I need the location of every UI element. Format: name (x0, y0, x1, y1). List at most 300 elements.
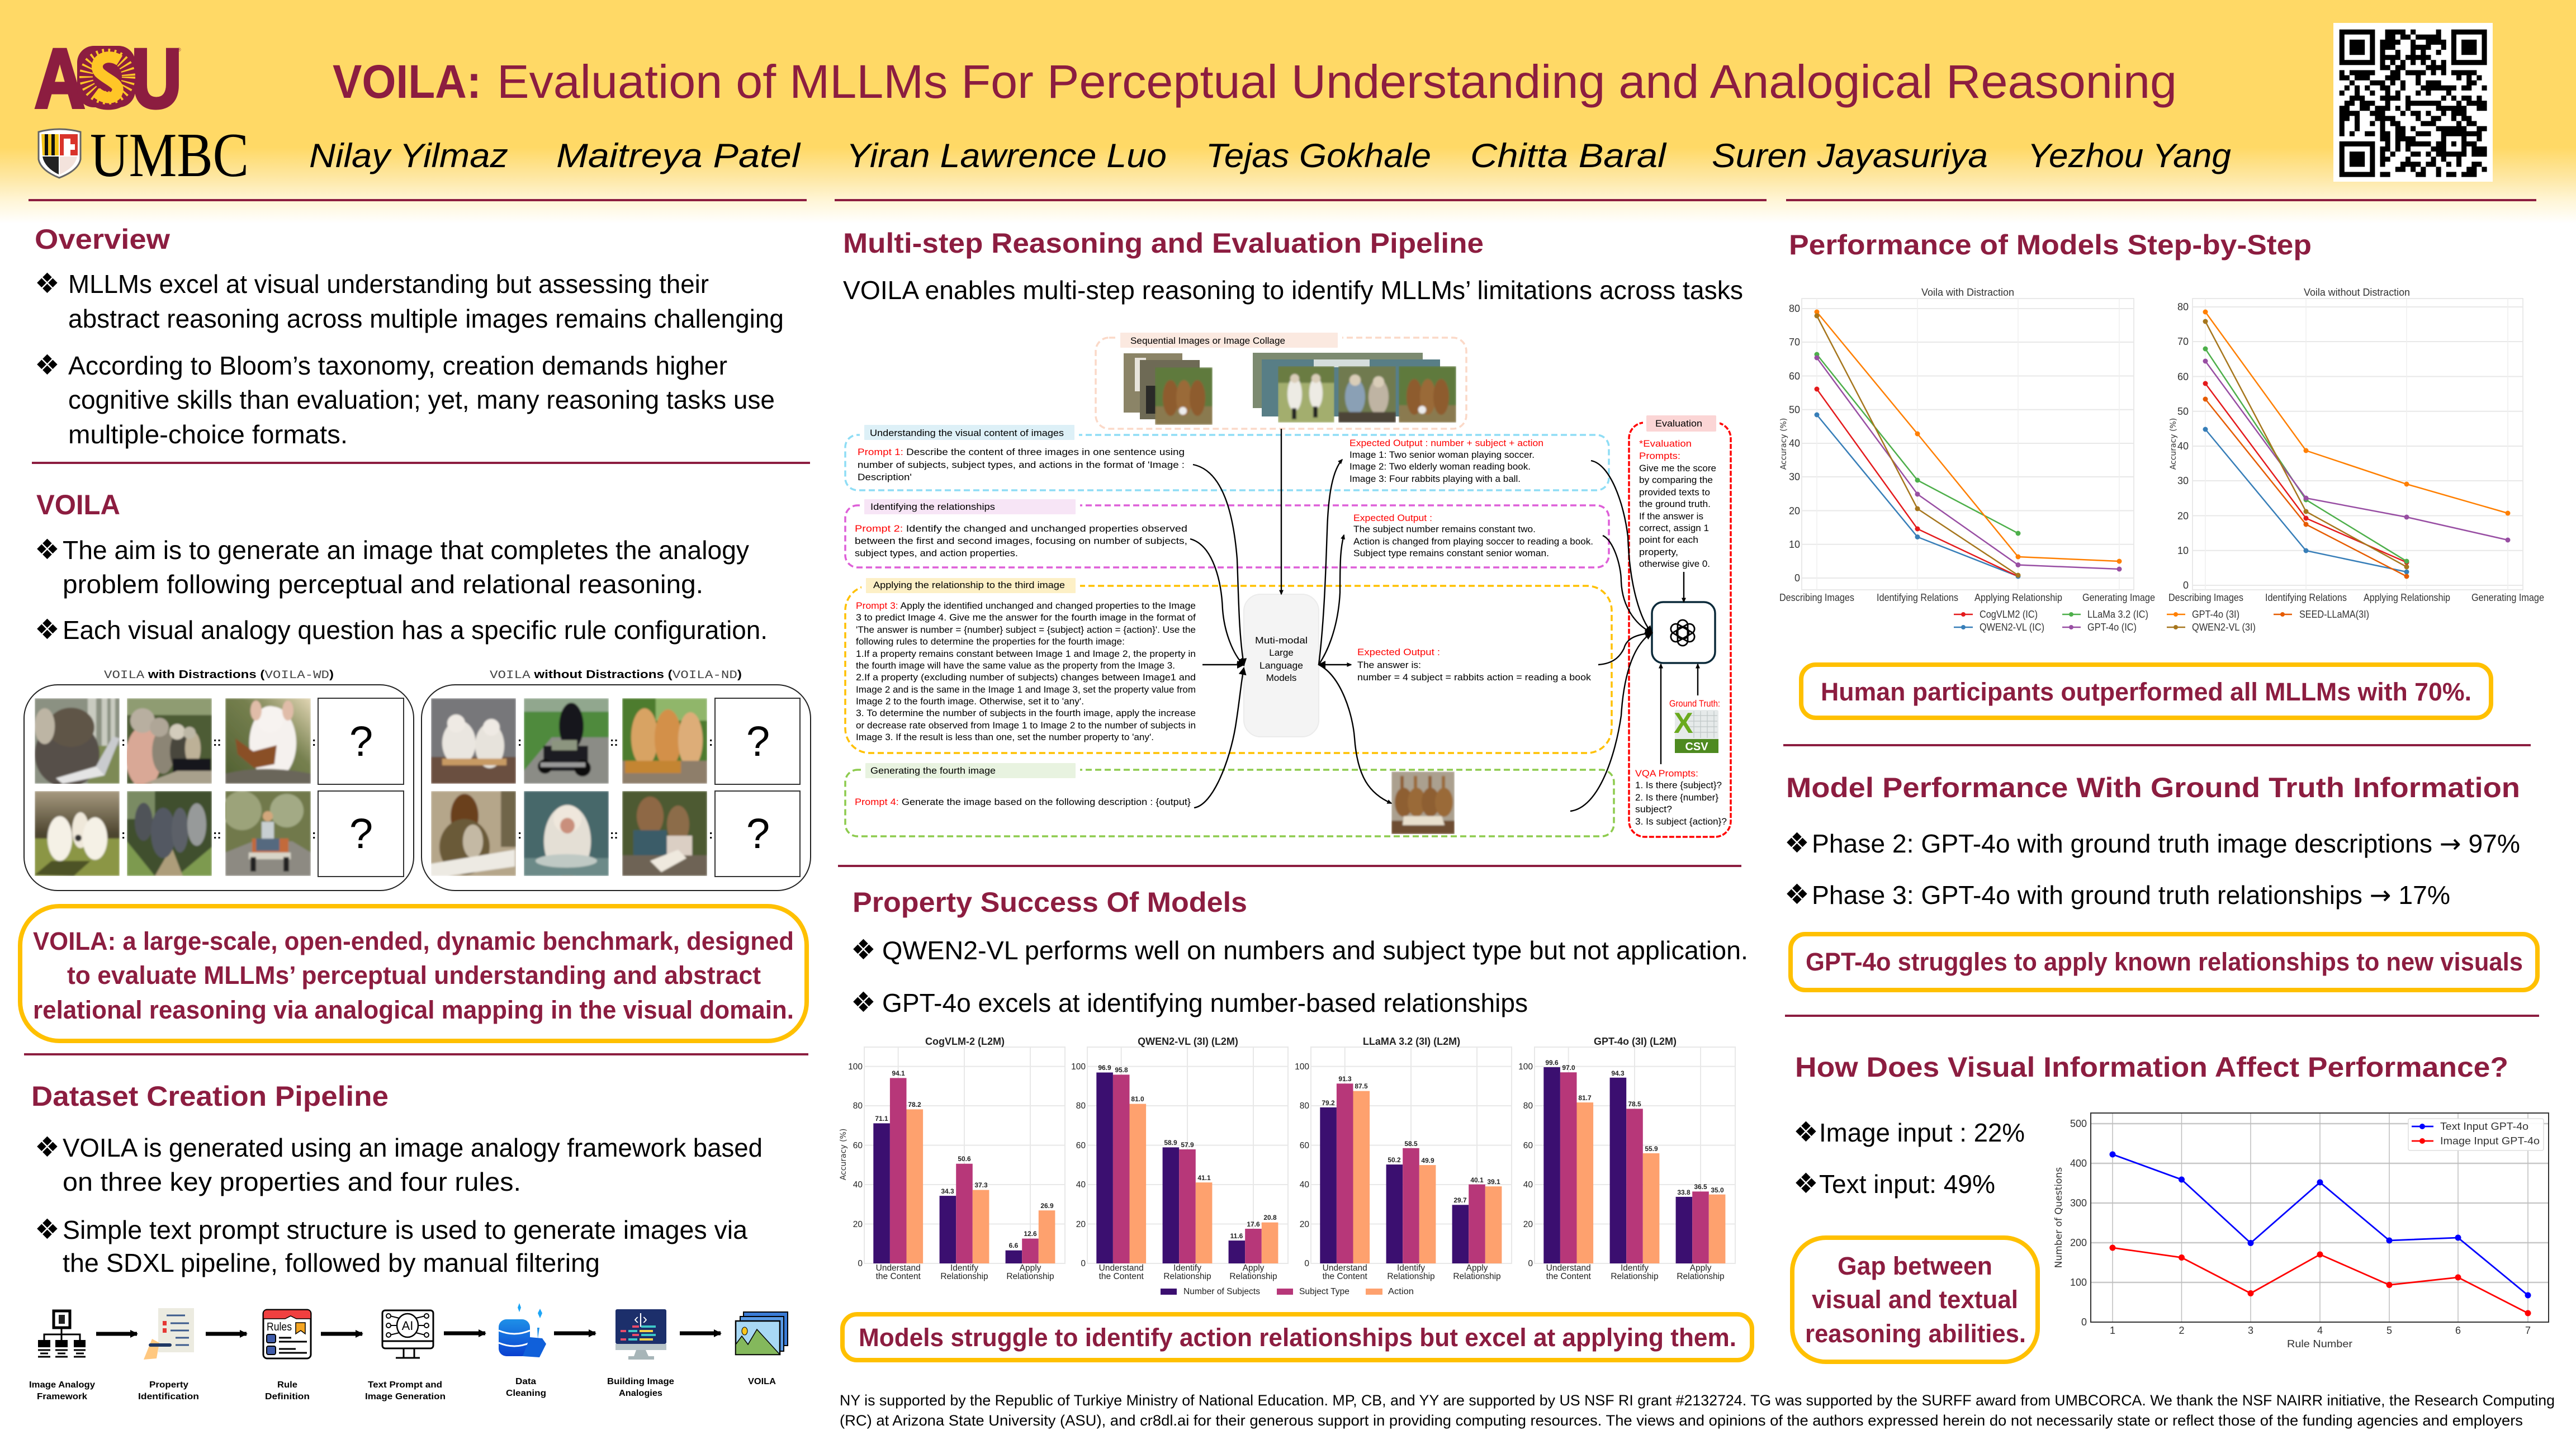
bar chart: GPT-4o (1518, 1036, 1735, 1281)
bar chart: CogVLM-2: Identify (950, 1263, 978, 1273)
dataset bullets: ❖ (35, 1131, 60, 1163)
evaluation prompts: Prompts: (1639, 451, 1680, 461)
input bullets: ❖ (1793, 1167, 1819, 1200)
image: women typing (127, 698, 212, 784)
prompt 1 (858, 447, 1185, 482)
bar chart: QWEN2-VL: the Content (1099, 1272, 1144, 1281)
line chart: without distraction: Accuracy (%) (2169, 418, 2178, 470)
line chart: with distraction: Identifying Relations (1877, 592, 1958, 603)
bar chart: GPT-4o: 97.0 (1562, 1064, 1575, 1072)
callout: VOILA definition (20, 906, 807, 1041)
line chart: with distraction: 10 (1789, 539, 1800, 550)
line chart legend: GPT-4o (3I) (2192, 609, 2239, 620)
arrow (206, 1332, 247, 1336)
pipeline labels: Image Analogy (29, 1380, 95, 1390)
bar chart: GPT-4o: 100 (1518, 1062, 1533, 1072)
panel: multi-modal LLM: Models (1266, 673, 1296, 683)
panel: generating the fourth image: Generating the fourth image (870, 765, 996, 776)
bar chart: GPT-4o: 33.8 (1677, 1188, 1690, 1196)
image: boy in toy car (225, 791, 311, 876)
icon: building image analogies: ‹|› (634, 1310, 647, 1327)
evaluation prompts: Give me the score (1639, 463, 1716, 473)
bar chart: GPT-4o: 0 (1528, 1259, 1533, 1268)
panel: multi-modal LLM: Large (1269, 647, 1294, 658)
pipeline labels: Analogies (619, 1389, 662, 1398)
bar chart: QWEN2-VL: Apply (1243, 1263, 1265, 1273)
icon: rule definition: Rules (267, 1321, 292, 1333)
bar chart: CogVLM-2: 26.9 (1040, 1202, 1054, 1210)
image: white monkey in water (524, 791, 609, 878)
panel: multi-modal LLM: Muti-modal (1255, 635, 1308, 646)
line chart: with distraction: 30 (1789, 471, 1800, 482)
header background (0, 0, 2576, 224)
bar chart: QWEN2-VL: 41.1 (1197, 1174, 1211, 1182)
line chart: rule number: 6 (2455, 1325, 2461, 1336)
bar chart: GPT-4o: Apply (1690, 1263, 1712, 1273)
expected output 2: Expected Output : (1353, 513, 1432, 523)
line chart: with distraction: 50 (1789, 404, 1800, 415)
line chart legend (1954, 609, 2369, 633)
bar chart: CogVLM-2: 20 (853, 1220, 863, 1229)
bar chart: QWEN2-VL: 100 (1071, 1062, 1086, 1072)
prompt 3: 3. To determine the number of subjects in the fourth image, apply the increase (856, 708, 1196, 718)
line chart legend: LLaMa 3.2 (IC) (2087, 609, 2148, 620)
bar chart: QWEN2-VL: 81.0 (1131, 1095, 1144, 1103)
icon: property identification (144, 1308, 194, 1360)
bar chart: GPT-4o: 94.3 (1611, 1069, 1625, 1077)
bar chart: QWEN2-VL: Identify (1173, 1263, 1201, 1273)
VQA prompts (1635, 768, 1727, 827)
analogy colons: : (312, 827, 316, 841)
heading: multi-step pipeline: Multi-step Reasoning and Evaluation Pipeline (843, 228, 1484, 259)
line chart: with distraction: 80 (1789, 303, 1800, 314)
figure title: with distractions: VOILA with Distractions ( VOILA-WD ) (104, 669, 334, 682)
callout: models struggle: Models struggle to identify action relationships but excel at applying them. (859, 1323, 1736, 1352)
bar chart: LLaMA 3.2: Identify (1397, 1263, 1425, 1273)
bar chart: QWEN2-VL: 0 (1081, 1259, 1086, 1268)
panel: generating the fourth image (845, 761, 1614, 836)
line chart: rule number: 0 (2081, 1317, 2087, 1328)
ground truth bullets (1784, 827, 2520, 911)
prompt 2: subject types, and action properties. (855, 548, 1018, 558)
evaluation prompts: *Evaluation (1639, 438, 1692, 449)
bar chart: QWEN2-VL: 95.8 (1115, 1066, 1128, 1074)
input bullets: Image input : 22% (1819, 1118, 2025, 1147)
expected output 1: Image 3: Four rabbits playing with a ball. (1349, 473, 1521, 484)
callout: VOILA definition: to evaluate MLLMs’ perceptual understanding and abstract (67, 961, 761, 989)
bar chart: LLaMA 3.2: 40 (1300, 1180, 1309, 1190)
callout: human participants: Human participants outperformed all MLLMs with 70%. (1821, 678, 2471, 706)
overview bullets: ❖ (35, 349, 60, 381)
bar chart: LLaMA 3.2: 100 (1295, 1062, 1309, 1072)
bar chart legend: Number of Subjects (1183, 1287, 1260, 1296)
overview bullets: multiple-choice formats. (68, 420, 348, 449)
icon: building image analogies (615, 1309, 666, 1360)
ground truth label: Ground Truth: (1669, 698, 1720, 709)
panel: step-by-step performance (1779, 229, 2544, 718)
dataset bullets: Simple text prompt structure is used to generate images via (63, 1215, 747, 1244)
line chart: without distraction: 70 (2177, 336, 2189, 347)
line chart: rule number: 300 (2070, 1197, 2087, 1209)
VQA prompts: VQA Prompts: (1635, 768, 1698, 779)
bar chart: QWEN2-VL: 20.8 (1263, 1214, 1277, 1221)
panel: visual information (1792, 1052, 2549, 1362)
title: VOILA: (333, 55, 481, 108)
panel: VOILA (35, 489, 768, 646)
box: unknown answer top (318, 698, 404, 784)
prompt 3: 2.If a property (excluding number of subjects) changes between Image1 and (856, 672, 1196, 683)
callout: models struggle (842, 1314, 1752, 1360)
evaluation prompts: correct, assign 1 (1639, 523, 1709, 533)
panel: understanding visual content (845, 423, 1609, 490)
image: rabbits reading (1391, 771, 1455, 834)
line chart: without distraction: Identifying Relations (2265, 592, 2347, 603)
evaluation prompts: the ground truth. (1639, 499, 1711, 509)
line chart: without distraction: 20 (2177, 510, 2189, 522)
dataset bullets: VOILA is generated using an image analogy framework based (63, 1133, 763, 1162)
callout: human participants (1801, 665, 2491, 718)
authors: Yiran Lawrence Luo (846, 137, 1167, 174)
line chart legend: CogVLM2 (IC) (1980, 609, 2038, 620)
VQA prompts: 3. Is subject {action}? (1635, 816, 1727, 827)
bar chart: GPT-4o: GPT-4o (3I) (L2M) (1594, 1036, 1677, 1047)
bar chart: QWEN2-VL: 11.6 (1230, 1232, 1243, 1240)
bar chart: GPT-4o: Identify (1621, 1263, 1649, 1273)
panel: evaluation (1629, 414, 1731, 837)
heading: dataset creation pipeline: Dataset Creation Pipeline (31, 1081, 389, 1112)
panel: multi-modal LLM (1244, 594, 1319, 737)
line chart: rule number: 3 (2248, 1325, 2253, 1336)
line chart: rule number: 400 (2070, 1158, 2087, 1169)
authors: Maitreya Patel (556, 137, 801, 174)
line chart: rule number: 500 (2070, 1118, 2087, 1129)
line chart: without distraction: 60 (2177, 371, 2189, 382)
arrow (680, 1332, 721, 1335)
callout: GPT-4o struggles (1791, 934, 2537, 990)
bar chart: LLaMA 3.2: 29.7 (1453, 1196, 1467, 1204)
bar chart: GPT-4o: 55.9 (1645, 1145, 1658, 1153)
arrows: diagram connectors (1190, 429, 1698, 811)
expected output 3 (1357, 647, 1592, 683)
pipeline labels: Rule (277, 1380, 297, 1390)
ground truth bullets: Phase 3: GPT-4o with ground truth relationships → 17% (1812, 880, 2450, 910)
property bullets: ❖ (851, 934, 876, 966)
line chart: rule number: 4 (2317, 1325, 2323, 1336)
VQA prompts: subject? (1635, 804, 1672, 815)
image: three hamsters (622, 698, 707, 784)
overview bullets: cognitive skills than evaluation; yet, many reasoning tasks use (68, 385, 775, 414)
bar chart: GPT-4o: 40 (1523, 1180, 1533, 1190)
line chart: without distraction: 50 (2177, 406, 2189, 417)
panel: sequential images (1096, 330, 1466, 429)
icon: VOILA image stack (736, 1312, 788, 1355)
bar chart: QWEN2-VL: QWEN2-VL (3I) (L2M) (1138, 1036, 1238, 1047)
prompt 3: Image 2 to the fourth image. Otherwise, set it to 'any'. (856, 696, 1084, 707)
analogy colons: : (121, 827, 125, 841)
bar chart: LLaMA 3.2: 39.1 (1487, 1178, 1500, 1186)
box: unknown answer bottom (318, 791, 404, 877)
bar chart: CogVLM-2: Apply (1020, 1263, 1041, 1273)
bar chart: LLaMA 3.2: 79.2 (1322, 1099, 1335, 1107)
callout: VOILA definition: relational reasoning via analogical mapping in the visual domain. (33, 996, 794, 1024)
analogy colons: : (709, 735, 713, 749)
bar chart: CogVLM-2: 60 (853, 1141, 863, 1150)
callout: gap (1792, 1238, 2038, 1362)
line chart: without distraction: Describing Images (2168, 592, 2243, 603)
VQA prompts: 2. Is there {number} (1635, 792, 1718, 803)
bar chart: CogVLM-2: 6.6 (1009, 1242, 1019, 1249)
bar chart: GPT-4o: 36.5 (1694, 1183, 1707, 1191)
panel: identifying relationships: Identifying the relationships (870, 501, 995, 512)
line chart: rule number: 200 (2070, 1237, 2087, 1248)
bar chart: CogVLM-2: 71.1 (875, 1115, 888, 1123)
callout: gap: reasoning abilities. (1805, 1319, 2026, 1348)
bar chart: LLaMA 3.2: 0 (1304, 1259, 1309, 1268)
image: hamsters and popcorn (431, 698, 516, 784)
line chart: without distraction: Voila without Distraction (2304, 287, 2410, 298)
bar chart: CogVLM-2: CogVLM-2 (L2M) (925, 1036, 1005, 1047)
bar chart: QWEN2-VL: Relationship (1229, 1272, 1277, 1281)
image: girls writing (622, 791, 707, 876)
line chart: rule number: 7 (2525, 1325, 2531, 1336)
icon: CSV file: CSV (1685, 741, 1708, 753)
pipeline labels: Property (149, 1380, 188, 1390)
logo: UMBC: UMBC (90, 121, 249, 190)
expected output 1 (1349, 438, 1543, 484)
bar chart: CogVLM-2 (848, 1036, 1065, 1281)
title: Evaluation of MLLMs For Perceptual Understanding and Analogical Reasoning (497, 55, 2177, 108)
bar chart: LLaMA 3.2: 20 (1300, 1220, 1309, 1229)
bar chart legend (1161, 1287, 1414, 1296)
dataset bullets: ❖ (35, 1213, 60, 1246)
analogy colons: :: (610, 827, 618, 841)
bar chart legend: Action (1388, 1287, 1414, 1296)
bar chart: LLaMA 3.2: Understand (1323, 1263, 1367, 1273)
icon: data cleaning (499, 1303, 546, 1357)
prompt 3: following rules to determine the properties for the fourth image: (856, 636, 1125, 647)
prompt 2: between the first and second images, focusing on number of subjects, (855, 536, 1187, 546)
pipeline labels: Data (515, 1377, 536, 1386)
authors: Suren Jayasuriya (1712, 137, 1988, 174)
authors (309, 137, 2231, 174)
bar chart: LLaMA 3.2: the Content (1323, 1272, 1367, 1281)
ground truth bullets: Phase 2: GPT-4o with ground truth image descriptions → 97% (1812, 828, 2520, 859)
line chart legend: GPT-4o (IC) (2087, 622, 2137, 633)
prompt 3 (856, 600, 1196, 742)
overview bullets: ❖ (35, 267, 60, 300)
property bullets: ❖ (851, 986, 876, 1019)
chart legend: Image Input GPT-4o (2440, 1135, 2540, 1147)
bar chart: QWEN2-VL: 20 (1076, 1220, 1086, 1229)
prompt 3: Image 2 and is the same in the Image 1 and Image 3, set the property value from (856, 684, 1196, 695)
input bullets: Text input: 49% (1819, 1169, 1995, 1199)
bar chart: CogVLM-2: the Content (876, 1272, 921, 1281)
diagram: reasoning pipeline (845, 330, 1731, 837)
prompt 1: Description' (858, 472, 912, 482)
evaluation prompts: otherwise give 0. (1639, 558, 1710, 569)
line chart: with distraction: 20 (1789, 505, 1800, 517)
bar chart: CogVLM-2: 12.6 (1024, 1230, 1037, 1238)
pipeline labels: Image Generation (365, 1392, 446, 1401)
heading: property success of models: Property Success Of Models (853, 887, 1247, 918)
VOILA bullets: ❖ (35, 533, 60, 566)
bar chart: LLaMA 3.2: Relationship (1387, 1272, 1435, 1281)
prompt 3: 3 to predict Image 4. Give me the answer for the fourth image in the format of (856, 612, 1196, 623)
text: acknowledgements (840, 1392, 2555, 1429)
bar chart: GPT-4o: Relationship (1677, 1272, 1725, 1281)
icon: text prompt and image generation: AI (402, 1319, 413, 1333)
box: unknown answer bottom: ? (349, 810, 373, 858)
panel: multi-modal LLM: Language (1259, 660, 1303, 671)
pipeline labels (29, 1377, 776, 1401)
authors: Yezhou Yang (2028, 137, 2231, 174)
authors: Nilay Yilmaz (309, 137, 508, 174)
line chart: rule number: 100 (2070, 1277, 2087, 1288)
box: unknown answer bottom (715, 791, 800, 877)
VOILA bullets: problem following perceptual and relational reasoning. (63, 570, 703, 599)
box: unknown answer top (715, 698, 800, 784)
bar chart: LLaMA 3.2: 80 (1300, 1101, 1309, 1111)
heading: ground truth performance: Model Performance With Ground Truth Information (1786, 772, 2520, 803)
bar chart: CogVLM-2: 50.6 (958, 1155, 971, 1163)
callout: GPT-4o struggles: GPT-4o struggles to apply known relationships to new visuals (1806, 948, 2523, 976)
bar chart: QWEN2-VL: 80 (1076, 1101, 1086, 1111)
VOILA bullets (35, 533, 768, 646)
heading: overview: Overview (35, 224, 170, 255)
line chart: without distraction: Generating Image (2471, 592, 2544, 603)
authors: Chitta Baral (1470, 137, 1667, 174)
icon: CSV file: X (1674, 707, 1693, 740)
analogy colons: :: (610, 735, 618, 749)
VOILA bullets: Each visual analogy question has a specific rule configuration. (63, 615, 768, 645)
icon: image analogy framework (38, 1311, 86, 1357)
expected output 1: Image 2: Two elderly woman reading book. (1349, 461, 1531, 472)
expected output 1: Image 1: Two senior woman playing soccer. (1349, 449, 1535, 460)
bar chart: CogVLM-2: 0 (858, 1259, 863, 1268)
arrow (96, 1332, 137, 1336)
prompt 3: 1.If a property remains constant between Image 1 and Image 2, the property in (856, 648, 1196, 659)
image: bear with laptop (35, 698, 120, 784)
bar chart: LLaMA 3.2: 40.1 (1470, 1176, 1484, 1184)
line chart: without distraction: 40 (2177, 441, 2189, 452)
line chart: without distraction (2168, 287, 2544, 603)
bar chart: LLaMA 3.2: 50.2 (1388, 1156, 1401, 1164)
line chart: with distraction: 0 (1794, 572, 1800, 584)
bar chart: CogVLM-2: 37.3 (974, 1181, 988, 1189)
line chart: with distraction: Generating Image (2082, 592, 2155, 603)
evaluation prompts: If the answer is (1639, 511, 1703, 522)
heading: VOILA: VOILA (36, 489, 120, 520)
line chart legend: SEED-LLaMA(3I) (2299, 609, 2369, 620)
callout: VOILA definition: VOILA: a large-scale, open-ended, dynamic benchmark, designed (33, 927, 794, 955)
prompt 3: Prompt 3: Apply the identified unchanged and changed properties to the Image (856, 600, 1196, 611)
bar chart: GPT-4o: 60 (1523, 1141, 1533, 1150)
analogy colons (121, 735, 316, 841)
input bullets (1793, 1116, 2025, 1200)
bar chart: GPT-4o: 78.5 (1628, 1100, 1641, 1108)
y axis label: Accuracy (%) (839, 1129, 848, 1180)
authors: Tejas Gokhale (1206, 137, 1431, 174)
ground truth bullets: ❖ (1784, 827, 1810, 859)
prompt 3: 'The answer is number = {number} subject = {subject} action = {action}'. Use the (856, 624, 1196, 635)
icon: text prompt and image generation (382, 1310, 433, 1358)
line chart: with distraction: Describing Images (1779, 592, 1854, 603)
line chart: without distraction: 80 (2177, 301, 2189, 312)
overview bullets (35, 267, 784, 449)
dataset bullets: on three key properties and four rules. (63, 1167, 521, 1196)
image: mouse reading (225, 698, 311, 784)
property bullets: QWEN2-VL performs well on numbers and subject type but not application. (882, 936, 1748, 965)
image: cats with ball (35, 791, 120, 876)
line chart: without distraction: Applying Relationship (2364, 592, 2450, 603)
line chart: with distraction: 60 (1789, 371, 1800, 382)
expected output 3: number = 4 subject = rabbits action = reading a book (1357, 672, 1592, 683)
bar chart: CogVLM-2: 40 (853, 1180, 863, 1190)
line chart: rule number: 2 (2179, 1325, 2185, 1336)
pipeline labels: Definition (265, 1392, 310, 1401)
line chart: rule number: 5 (2386, 1325, 2392, 1336)
panel: applying the relationship: Applying the relationship to the third image (873, 580, 1065, 590)
figure title: without distractions: VOILA without Distractions ( VOILA-ND ) (490, 669, 742, 682)
bar chart: CogVLM-2: 94.1 (892, 1069, 905, 1077)
line chart legend: QWEN2-VL (IC) (1980, 622, 2044, 633)
panel: example analogies without distractions (422, 685, 811, 891)
line chart legend: QWEN2-VL (3I) (2192, 622, 2256, 633)
ground truth bullets: ❖ (1784, 878, 1810, 911)
icon: rule definition (263, 1310, 311, 1358)
line chart: without distraction: 10 (2177, 545, 2189, 556)
dataset bullets (35, 1131, 763, 1277)
VQA prompts: 1. Is there {subject}? (1635, 780, 1722, 790)
bar chart: CogVLM-2: Relationship (940, 1272, 988, 1281)
bar chart: GPT-4o: 20 (1523, 1220, 1533, 1229)
panel: evaluation: Evaluation (1655, 418, 1702, 429)
line chart: without distraction: 0 (2183, 580, 2189, 591)
evaluation prompts: point for each (1639, 534, 1698, 545)
text: acknowledgements: (RC) at Arizona State University (ASU), and cr8dl.ai for their generous support in providing computing resources. The views and opinions of the authors expressed herein do not necessarily state or reflect those of the funding agencies and employers (840, 1412, 2523, 1429)
panel: dataset creation pipeline (29, 1081, 788, 1401)
pipeline labels: Identification (138, 1392, 199, 1401)
line chart: rule number (2053, 1113, 2549, 1349)
pipeline labels: VOILA (748, 1377, 776, 1386)
expected output 2: Subject type remains constant senior woman. (1353, 548, 1549, 558)
icon: ChatGPT evaluator (1652, 602, 1715, 663)
bar chart: GPT-4o: Relationship (1611, 1272, 1659, 1281)
bar chart: CogVLM-2: 80 (853, 1101, 863, 1111)
bar chart: CogVLM-2: Relationship (1006, 1272, 1054, 1281)
bar chart: QWEN2-VL: Understand (1099, 1263, 1144, 1273)
pipeline labels: Text Prompt and (368, 1380, 442, 1390)
panel: example analogies with distractions (24, 685, 414, 891)
line chart: with distraction: Accuracy (%) (1779, 418, 1788, 470)
bar chart: GPT-4o: the Content (1546, 1272, 1591, 1281)
pipeline labels: Building Image (607, 1377, 674, 1386)
line chart: rule number: Rule Number (2287, 1338, 2352, 1349)
bar chart: QWEN2-VL: 40 (1076, 1180, 1086, 1190)
bar chart: QWEN2-VL: 96.9 (1098, 1064, 1111, 1072)
bar chart: QWEN2-VL: Relationship (1163, 1272, 1211, 1281)
text: acknowledgements: NY is supported by the Republic of Turkiye Ministry of National Education. MP, CB, and YY are supported by US NSF RI grant #2132724. TG was supported by the SURFF award from UMBCORCA. We thank the NSF NAIRR initiative, the Research Computing (840, 1392, 2555, 1409)
prompt 3: or decrease rate observed from Image 1 to Image 2 to the number of subjects in (856, 720, 1196, 731)
bar chart legend: Subject Type (1299, 1287, 1349, 1296)
text: pipeline intro: VOILA enables multi-step reasoning to identify MLLMs’ limitations across tasks (843, 276, 1743, 305)
callout: gap: Gap between (1838, 1252, 1992, 1280)
bar chart: QWEN2-VL (1071, 1036, 1288, 1281)
pipeline labels: Framework (37, 1392, 87, 1401)
image: black bear in car (524, 698, 609, 784)
VOILA bullets: The aim is to generate an image that completes the analogy (63, 536, 749, 565)
overview bullets: MLLMs excel at visual understanding but assessing their (68, 269, 709, 299)
